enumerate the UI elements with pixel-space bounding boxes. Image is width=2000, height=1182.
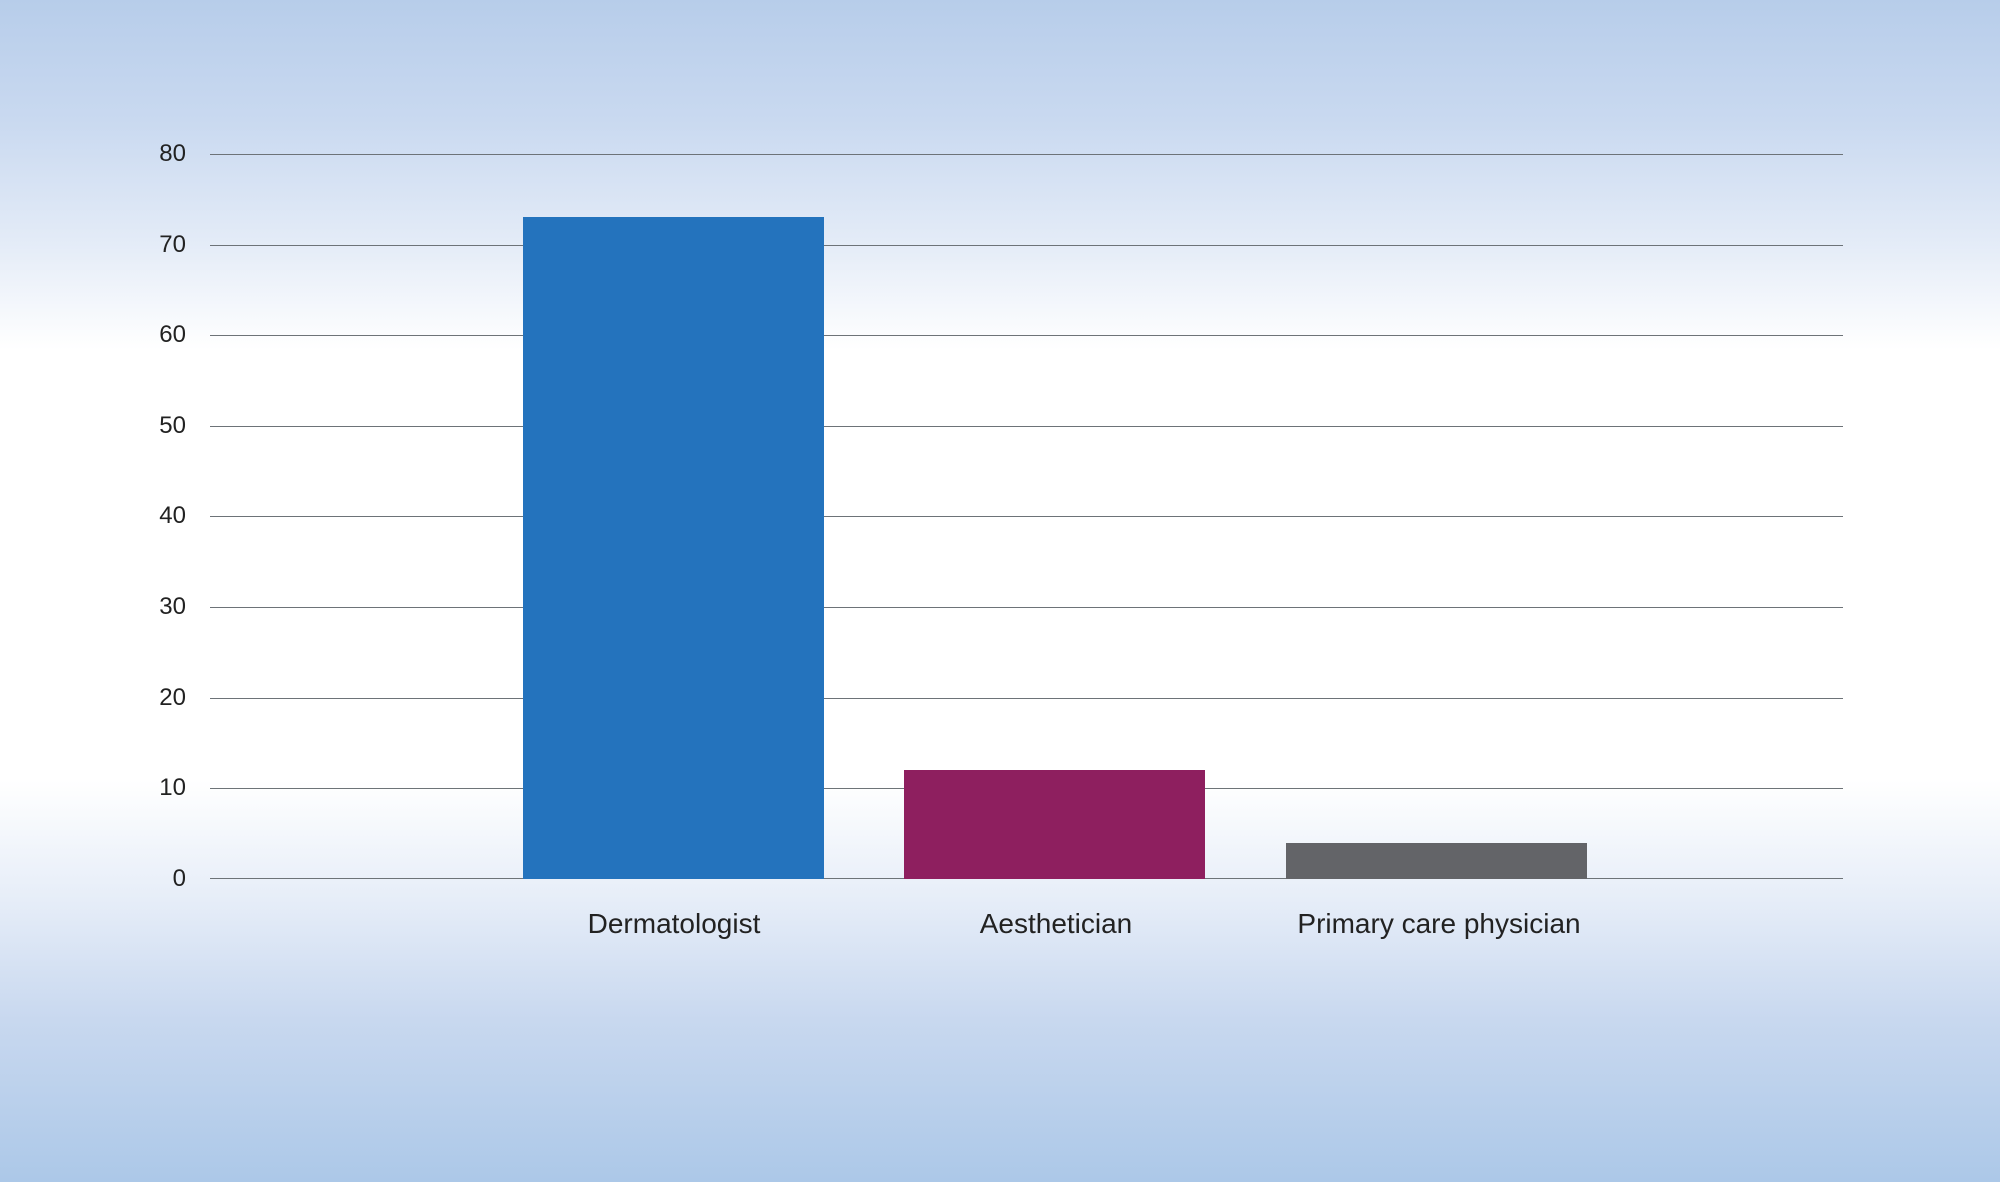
gridlines and y-axis labels: 60 <box>159 321 186 348</box>
bar: Aesthetician <box>904 770 1205 879</box>
gridlines and y-axis labels: 80 <box>159 140 186 167</box>
label: Dermatologist: Dermatologist <box>588 908 760 939</box>
gridlines and y-axis labels: 40 <box>159 502 186 529</box>
gridlines and y-axis labels <box>159 140 1843 892</box>
label: Aesthetician: Aesthetician <box>980 908 1132 939</box>
bar: Primary care physician <box>1286 843 1587 879</box>
label: Primary care physician: Primary care physician <box>1297 908 1581 939</box>
chart <box>159 140 1843 892</box>
gridlines and y-axis labels: 10 <box>159 774 186 801</box>
bar: Dermatologist <box>523 217 824 879</box>
gridlines and y-axis labels: 0 <box>173 865 186 892</box>
gridlines and y-axis labels: 50 <box>159 412 186 439</box>
gridlines and y-axis labels: 70 <box>159 231 186 258</box>
gridlines and y-axis labels: 20 <box>159 684 186 711</box>
gridlines and y-axis labels: 30 <box>159 593 186 620</box>
